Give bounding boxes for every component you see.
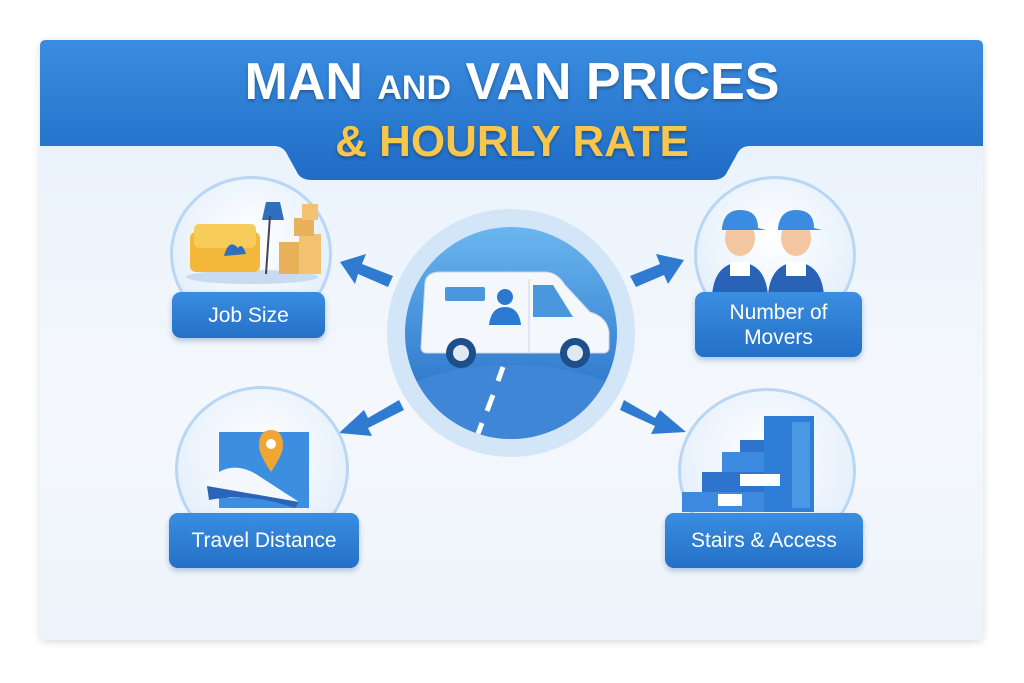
label: stairs and access: Stairs & Access	[691, 529, 837, 552]
label: number of movers: Number of	[729, 300, 828, 324]
icon: two movers	[712, 210, 824, 292]
panel: travel distance	[166, 386, 362, 574]
label: job size: Job Size	[208, 304, 289, 326]
header banner	[40, 40, 983, 180]
label: stairs and access	[665, 513, 863, 568]
label: job size	[172, 292, 325, 338]
label: travel distance: Travel Distance	[191, 529, 337, 552]
icon: stairs and door	[682, 416, 814, 512]
subtitle: & HOURLY RATE	[335, 117, 689, 166]
panel: job size	[169, 176, 332, 344]
panel: stairs and access	[662, 388, 866, 574]
arrow: to stairs	[620, 400, 686, 434]
center van circle	[387, 209, 635, 457]
title: MAN AND VAN PRICES	[244, 53, 779, 111]
van	[421, 272, 609, 368]
label: number of movers	[695, 292, 862, 357]
panel: number of movers	[692, 176, 865, 363]
arrow: to travel	[339, 400, 404, 436]
arrow: to job size	[340, 254, 393, 287]
arrow: to movers	[630, 254, 684, 287]
label: travel distance	[169, 513, 359, 568]
icon: sofa and boxes	[186, 202, 321, 284]
label: number of movers: Movers	[744, 326, 813, 348]
icon: map with pin	[207, 430, 309, 508]
